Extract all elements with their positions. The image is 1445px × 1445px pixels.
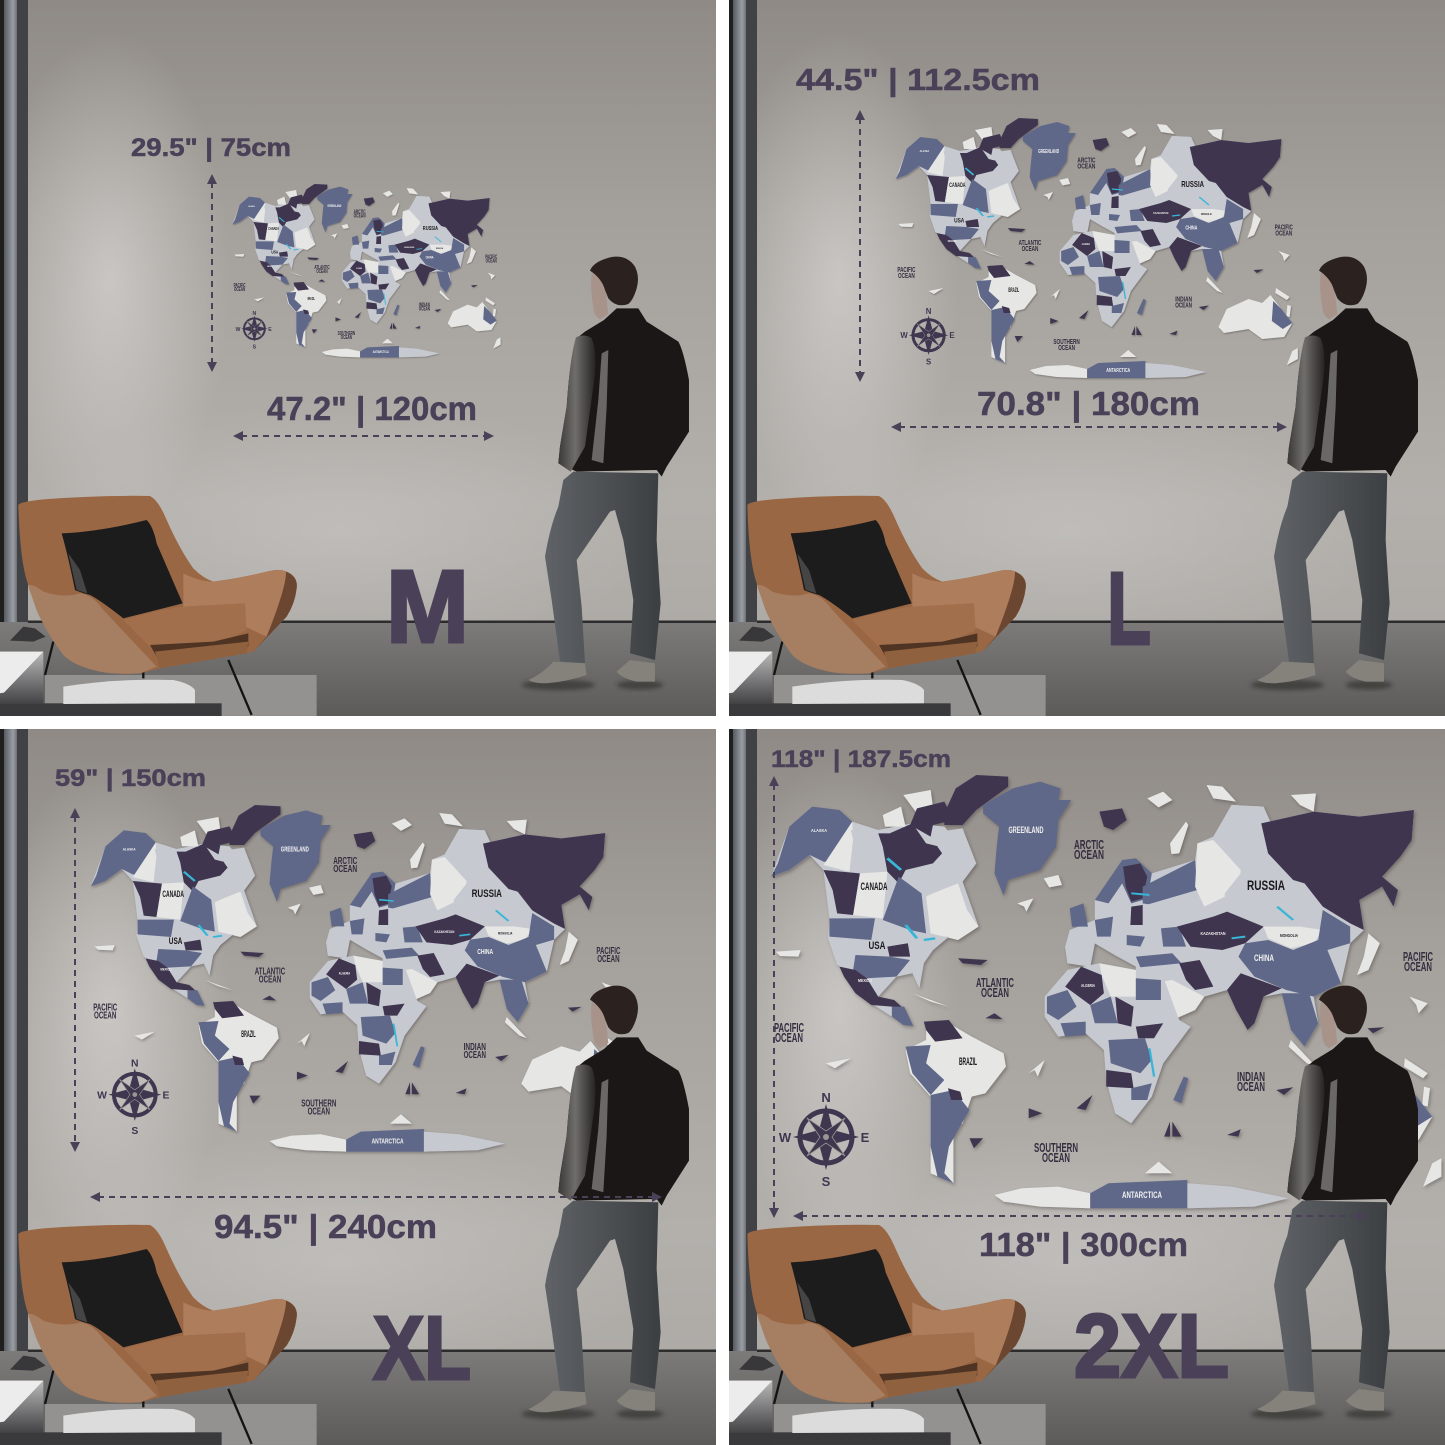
room scene: wall, window, floor, armchair	[719, 0, 1445, 716]
compass: S	[253, 344, 257, 350]
map shapes	[896, 118, 1298, 378]
map labels: SOUTHERN	[1053, 337, 1080, 346]
size letter: XL	[373, 1299, 471, 1399]
room scene: wall, window, floor, armchair	[0, 0, 716, 716]
size letter: L	[1107, 551, 1151, 666]
compass: S	[926, 358, 931, 367]
map labels: CHINA	[1185, 226, 1197, 232]
map labels: USA	[271, 250, 279, 255]
map labels: GREENLAND	[1038, 149, 1059, 155]
world map, size XL	[91, 805, 627, 1152]
map labels: OCEAN	[464, 1050, 486, 1061]
map labels: KAZAKHSTAN	[1200, 931, 1226, 936]
compass: E	[949, 331, 955, 340]
map labels: ARCTIC	[333, 856, 357, 867]
width label: 94.5" | 240cm	[214, 1208, 437, 1245]
map labels: USA	[868, 940, 886, 952]
map labels: OCEAN	[419, 306, 430, 312]
map labels: ANTARCTICA	[372, 1136, 404, 1145]
map labels: PACIFIC	[897, 265, 916, 274]
map labels: OCEAN	[308, 1107, 330, 1118]
map labels: RUSSIA	[1181, 179, 1204, 189]
map labels: MEXICO	[160, 968, 172, 972]
map labels: PACIFIC	[234, 283, 246, 289]
map labels: KAZAKHSTAN	[1153, 211, 1168, 215]
map labels: MONGOLIA	[1280, 933, 1299, 938]
map labels: ALGERIA	[1082, 242, 1090, 246]
room scene: wall, window, floor, armchair	[719, 729, 1445, 1445]
map labels: PACIFIC	[596, 946, 620, 957]
panel: size 2XL	[729, 729, 1445, 1445]
map labels: MEXICO	[267, 266, 273, 268]
map labels: BRAZIL	[1008, 287, 1019, 294]
map labels: OCEAN	[259, 975, 281, 986]
map labels: INDIAN	[1237, 1070, 1265, 1084]
map labels: ARCTIC	[354, 210, 366, 216]
compass	[900, 307, 955, 367]
map labels: GREENLAND	[281, 844, 309, 853]
map labels: SOUTHERN	[1034, 1141, 1078, 1155]
compass: W	[779, 1130, 792, 1145]
map labels: ALASKA	[123, 848, 136, 852]
size letter: M	[386, 549, 469, 664]
map labels: CANADA	[860, 881, 888, 893]
map labels: CHINA	[1254, 953, 1274, 964]
map labels: INDIAN	[419, 302, 430, 308]
width arrow	[233, 431, 494, 441]
map labels: ALGERIA	[1081, 983, 1096, 988]
compass: N	[131, 1059, 139, 1070]
map labels	[234, 204, 497, 354]
map labels: OCEAN	[316, 269, 328, 275]
map labels: ANTARCTICA	[1122, 1190, 1162, 1201]
map labels: CANADA	[949, 182, 966, 189]
map labels: ARCTIC	[1074, 838, 1104, 852]
map labels: OCEAN	[486, 258, 497, 264]
width arrow	[891, 422, 1287, 432]
man viewing the map	[522, 986, 689, 1419]
map labels: ATLANTIC	[976, 976, 1014, 990]
map labels: MONGOLIA	[1201, 212, 1212, 216]
man viewing the map	[522, 257, 689, 690]
map labels: SOUTHERN	[301, 1099, 336, 1110]
map labels: BRAZIL	[959, 1056, 977, 1068]
map labels: OCEAN	[1237, 1080, 1265, 1094]
world map, size 2XL	[771, 775, 1441, 1208]
map labels: OCEAN	[1275, 229, 1292, 238]
map labels: KAZAKHSTAN	[434, 930, 455, 934]
map labels	[897, 149, 1293, 374]
map labels: ANTARCTICA	[1106, 368, 1130, 374]
map labels: ATLANTIC	[255, 967, 285, 978]
width arrow	[90, 1192, 662, 1202]
map labels: USA	[169, 936, 183, 946]
width label: 70.8" | 180cm	[977, 385, 1200, 422]
map labels: PACIFIC	[93, 1003, 117, 1014]
map labels: ALGERIA	[339, 972, 350, 976]
room scene: wall, window, floor, armchair	[0, 729, 716, 1445]
compass: W	[236, 327, 241, 333]
map labels: RUSSIA	[423, 226, 438, 232]
map labels	[93, 844, 620, 1145]
size letter: 2XL	[1074, 1297, 1229, 1397]
map labels: OCEAN	[1022, 244, 1038, 253]
map labels: SOUTHERN	[338, 331, 355, 337]
map labels: OCEAN	[94, 1011, 116, 1022]
height label: 59" | 150cm	[55, 765, 206, 792]
map labels: OCEAN	[597, 954, 620, 965]
map labels: KAZAKHSTAN	[404, 246, 415, 249]
compass: S	[822, 1174, 831, 1189]
map labels: ALASKA	[811, 828, 828, 833]
height arrow	[70, 808, 80, 1152]
width arrow	[793, 1211, 1367, 1221]
map labels: ALASKA	[248, 205, 255, 208]
map labels: ANTARCTICA	[373, 350, 389, 354]
height label: 29.5" | 75cm	[131, 134, 291, 162]
compass: E	[268, 327, 272, 333]
compass: N	[926, 307, 932, 316]
panel: size XL	[0, 729, 716, 1445]
map labels: OCEAN	[1175, 301, 1192, 310]
map labels: OCEAN	[1058, 343, 1075, 352]
compass: W	[900, 331, 908, 340]
map labels: BRAZIL	[308, 296, 315, 301]
map labels: MONGOLIA	[498, 932, 513, 936]
height arrow	[769, 776, 779, 1218]
map labels: OCEAN	[1077, 161, 1095, 170]
map labels: CANADA	[268, 226, 279, 231]
map labels: OCEAN	[775, 1031, 803, 1045]
map labels: MEXICO	[948, 239, 956, 243]
map labels: MEXICO	[858, 978, 872, 983]
map labels: PACIFIC	[1275, 223, 1293, 232]
world map, size M	[232, 184, 501, 357]
map labels: RUSSIA	[1247, 877, 1285, 893]
compass	[97, 1059, 170, 1137]
map shapes	[771, 775, 1441, 1208]
panel: size L	[729, 0, 1445, 716]
width label: 118" | 300cm	[979, 1226, 1188, 1263]
map labels: MONGOLIA	[436, 247, 444, 250]
map labels: ATLANTIC	[1019, 238, 1042, 247]
world map, size L	[896, 118, 1298, 378]
man viewing the map	[1251, 986, 1418, 1419]
map labels: OCEAN	[981, 986, 1009, 1000]
map labels: PACIFIC	[774, 1021, 804, 1035]
height label: 118" | 187.5cm	[771, 746, 951, 773]
map labels: RUSSIA	[472, 888, 502, 900]
map labels: OCEAN	[1074, 848, 1104, 862]
compass: E	[163, 1091, 170, 1102]
map labels: OCEAN	[333, 864, 357, 875]
map labels: PACIFIC	[485, 254, 497, 260]
map labels: ALGERIA	[356, 267, 362, 270]
map shapes	[91, 805, 627, 1152]
map labels: ALASKA	[920, 149, 929, 153]
compass: N	[821, 1090, 831, 1105]
map labels: ARCTIC	[1077, 155, 1096, 164]
compass: N	[253, 311, 257, 317]
map labels: OCEAN	[1042, 1151, 1070, 1165]
map labels: CHINA	[477, 947, 494, 956]
map labels	[774, 825, 1433, 1201]
map labels: OCEAN	[234, 287, 245, 293]
map labels: GREENLAND	[327, 204, 342, 208]
panel: size M	[0, 0, 716, 716]
map labels: CANADA	[162, 889, 184, 899]
compass	[236, 311, 272, 350]
map labels: OCEAN	[898, 271, 915, 280]
map labels: INDIAN	[464, 1042, 486, 1053]
compass: W	[97, 1091, 107, 1102]
map labels: OCEAN	[341, 335, 352, 341]
compass	[779, 1090, 870, 1189]
compass: S	[131, 1126, 138, 1137]
compass: E	[861, 1130, 870, 1145]
map labels: USA	[954, 217, 964, 224]
height arrow	[207, 174, 217, 372]
map labels: CHINA	[426, 255, 434, 259]
man viewing the map	[1251, 257, 1418, 690]
map labels: OCEAN	[354, 214, 366, 220]
width label: 47.2" | 120cm	[267, 390, 477, 427]
height arrow	[855, 110, 865, 382]
map labels: GREENLAND	[1008, 825, 1044, 836]
height label: 44.5" | 112.5cm	[796, 62, 1040, 97]
map shapes	[232, 184, 501, 357]
map labels: BRAZIL	[241, 1029, 256, 1039]
map labels: INDIAN	[1175, 295, 1192, 304]
map labels: ATLANTIC	[314, 265, 330, 271]
